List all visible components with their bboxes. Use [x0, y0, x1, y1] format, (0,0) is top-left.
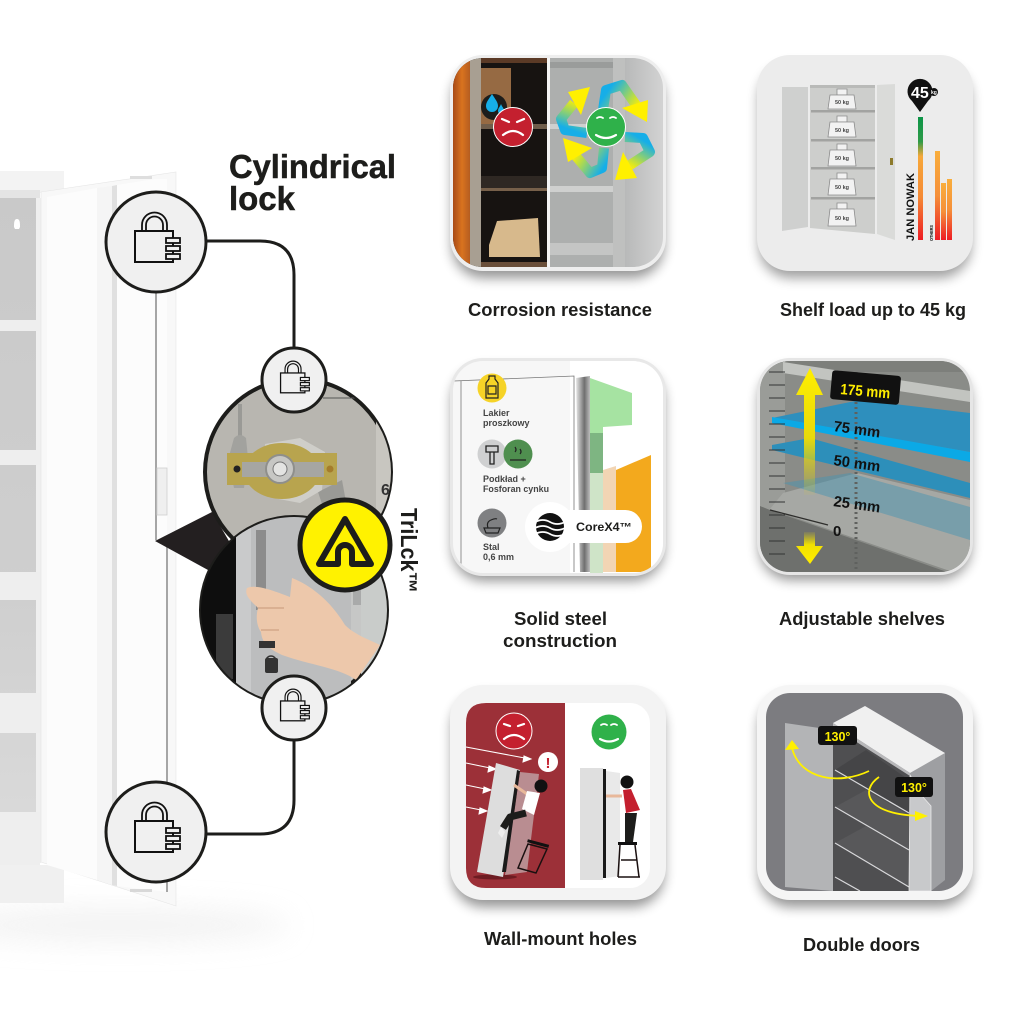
ruler ticks [769, 372, 785, 554]
icon: small lock top [262, 348, 326, 412]
icon: large lock bottom [106, 782, 206, 882]
label: solid steel construction: Solid steel [514, 609, 607, 629]
label: solid steel construction [503, 609, 617, 651]
shelf measurements: 75 mm [832, 418, 881, 442]
title: Cylindrical lock: Cylindrical [229, 148, 396, 185]
icon: large lock top [106, 192, 206, 292]
detail circle: TriLck hand and padlock [200, 515, 391, 705]
badge: 175 mm [830, 370, 901, 405]
icon: TriLock yellow badge [300, 500, 390, 590]
bar chart [905, 117, 952, 241]
bar chart: OTHERS [929, 225, 934, 241]
badge: 130 degrees right: 130° [901, 781, 927, 795]
cabinet with open door [0, 171, 290, 941]
text: powder coat: Lakier [483, 408, 510, 418]
badge: 45 kg: 45 [911, 85, 929, 102]
panel: wall-mount holes [450, 685, 666, 907]
rusted cabinet side [453, 58, 548, 268]
red unsafe side: ! [546, 755, 550, 772]
title: Cylindrical lock: lock [229, 180, 296, 217]
text: steel thickness [483, 542, 514, 562]
connector line: bottom [206, 740, 294, 834]
rotation arrows [785, 740, 928, 821]
cabinet with weights: 50 kg [835, 128, 849, 134]
clean steel cabinet side [547, 58, 665, 268]
icon: sad face [494, 108, 532, 146]
badge: 45 kg [908, 79, 938, 112]
text: steel thickness: 0,6 mm [483, 552, 514, 562]
bar chart: JAN NOWAK [905, 173, 917, 241]
badge: 175 mm: 175 mm [840, 381, 891, 402]
panel: adjustable shelves [757, 358, 973, 580]
panel: double doors [757, 685, 973, 907]
vertical label: TriLck: TriLck™ [396, 508, 422, 593]
white safe side [580, 714, 640, 880]
label: corrosion resistance: Corrosion resistance [468, 300, 652, 320]
cabinet with weights: 50 kg [835, 216, 849, 222]
panel: shelf load [757, 55, 973, 278]
badge: 45 kg: kg [931, 90, 937, 96]
pill: CoreX4: CoreX4™ [576, 522, 632, 534]
red unsafe side [466, 703, 565, 888]
text: primer and zinc phosphate: Fosforan cynku [483, 484, 549, 494]
cabinet with weights: 50 kg [835, 185, 849, 191]
badge: 130 degrees left [818, 726, 857, 745]
detail circle: cylindrical lock mechanism [203, 382, 393, 540]
icon: small lock bottom [262, 676, 326, 740]
pointer triangle [155, 512, 240, 570]
cabinet isometric [785, 706, 945, 891]
arrow down [796, 532, 823, 564]
cabinet with weights [782, 84, 895, 240]
shelf measurements [832, 418, 881, 540]
panel: corrosion resistance [450, 55, 666, 278]
shelf measurements: 25 mm [832, 493, 881, 517]
title: Cylindrical lock [229, 148, 396, 217]
label: wall-mount holes: Wall-mount holes [484, 929, 637, 949]
icon: happy face [586, 108, 626, 146]
icon: brush and primer [478, 440, 532, 468]
icon: spray can [478, 374, 506, 402]
text: primer and zinc phosphate [483, 474, 549, 494]
shelf measurements: 50 mm [832, 452, 881, 476]
label: double doors: Double doors [803, 935, 920, 955]
pill: CoreX4 [525, 502, 642, 552]
badge: 130 degrees left: 130° [825, 730, 850, 744]
shelf measurements: 0 [833, 523, 841, 540]
icon: water drops [481, 94, 507, 120]
cabinet with weights: 50 kg [835, 156, 849, 162]
label: shelf load: Shelf load up to 45 kg [780, 300, 966, 320]
text: powder coat: proszkowy [483, 418, 530, 428]
text: steel thickness: Stal [483, 542, 500, 552]
icon: steel [478, 508, 506, 538]
text: powder coat [483, 408, 530, 428]
connector line: top [206, 241, 294, 348]
text: primer and zinc phosphate: Podkład + [483, 474, 526, 484]
label: solid steel construction: construction [503, 631, 617, 651]
arrow up [796, 368, 823, 495]
cabinet with weights: 50 kg [835, 100, 849, 106]
label: adjustable shelves: Adjustable shelves [779, 609, 945, 629]
panel: solid steel construction [450, 358, 666, 581]
recycle arrows [561, 85, 650, 180]
badge: 130 degrees right [895, 777, 933, 797]
detail circle: cylindrical lock mechanism: 6 [381, 482, 390, 499]
